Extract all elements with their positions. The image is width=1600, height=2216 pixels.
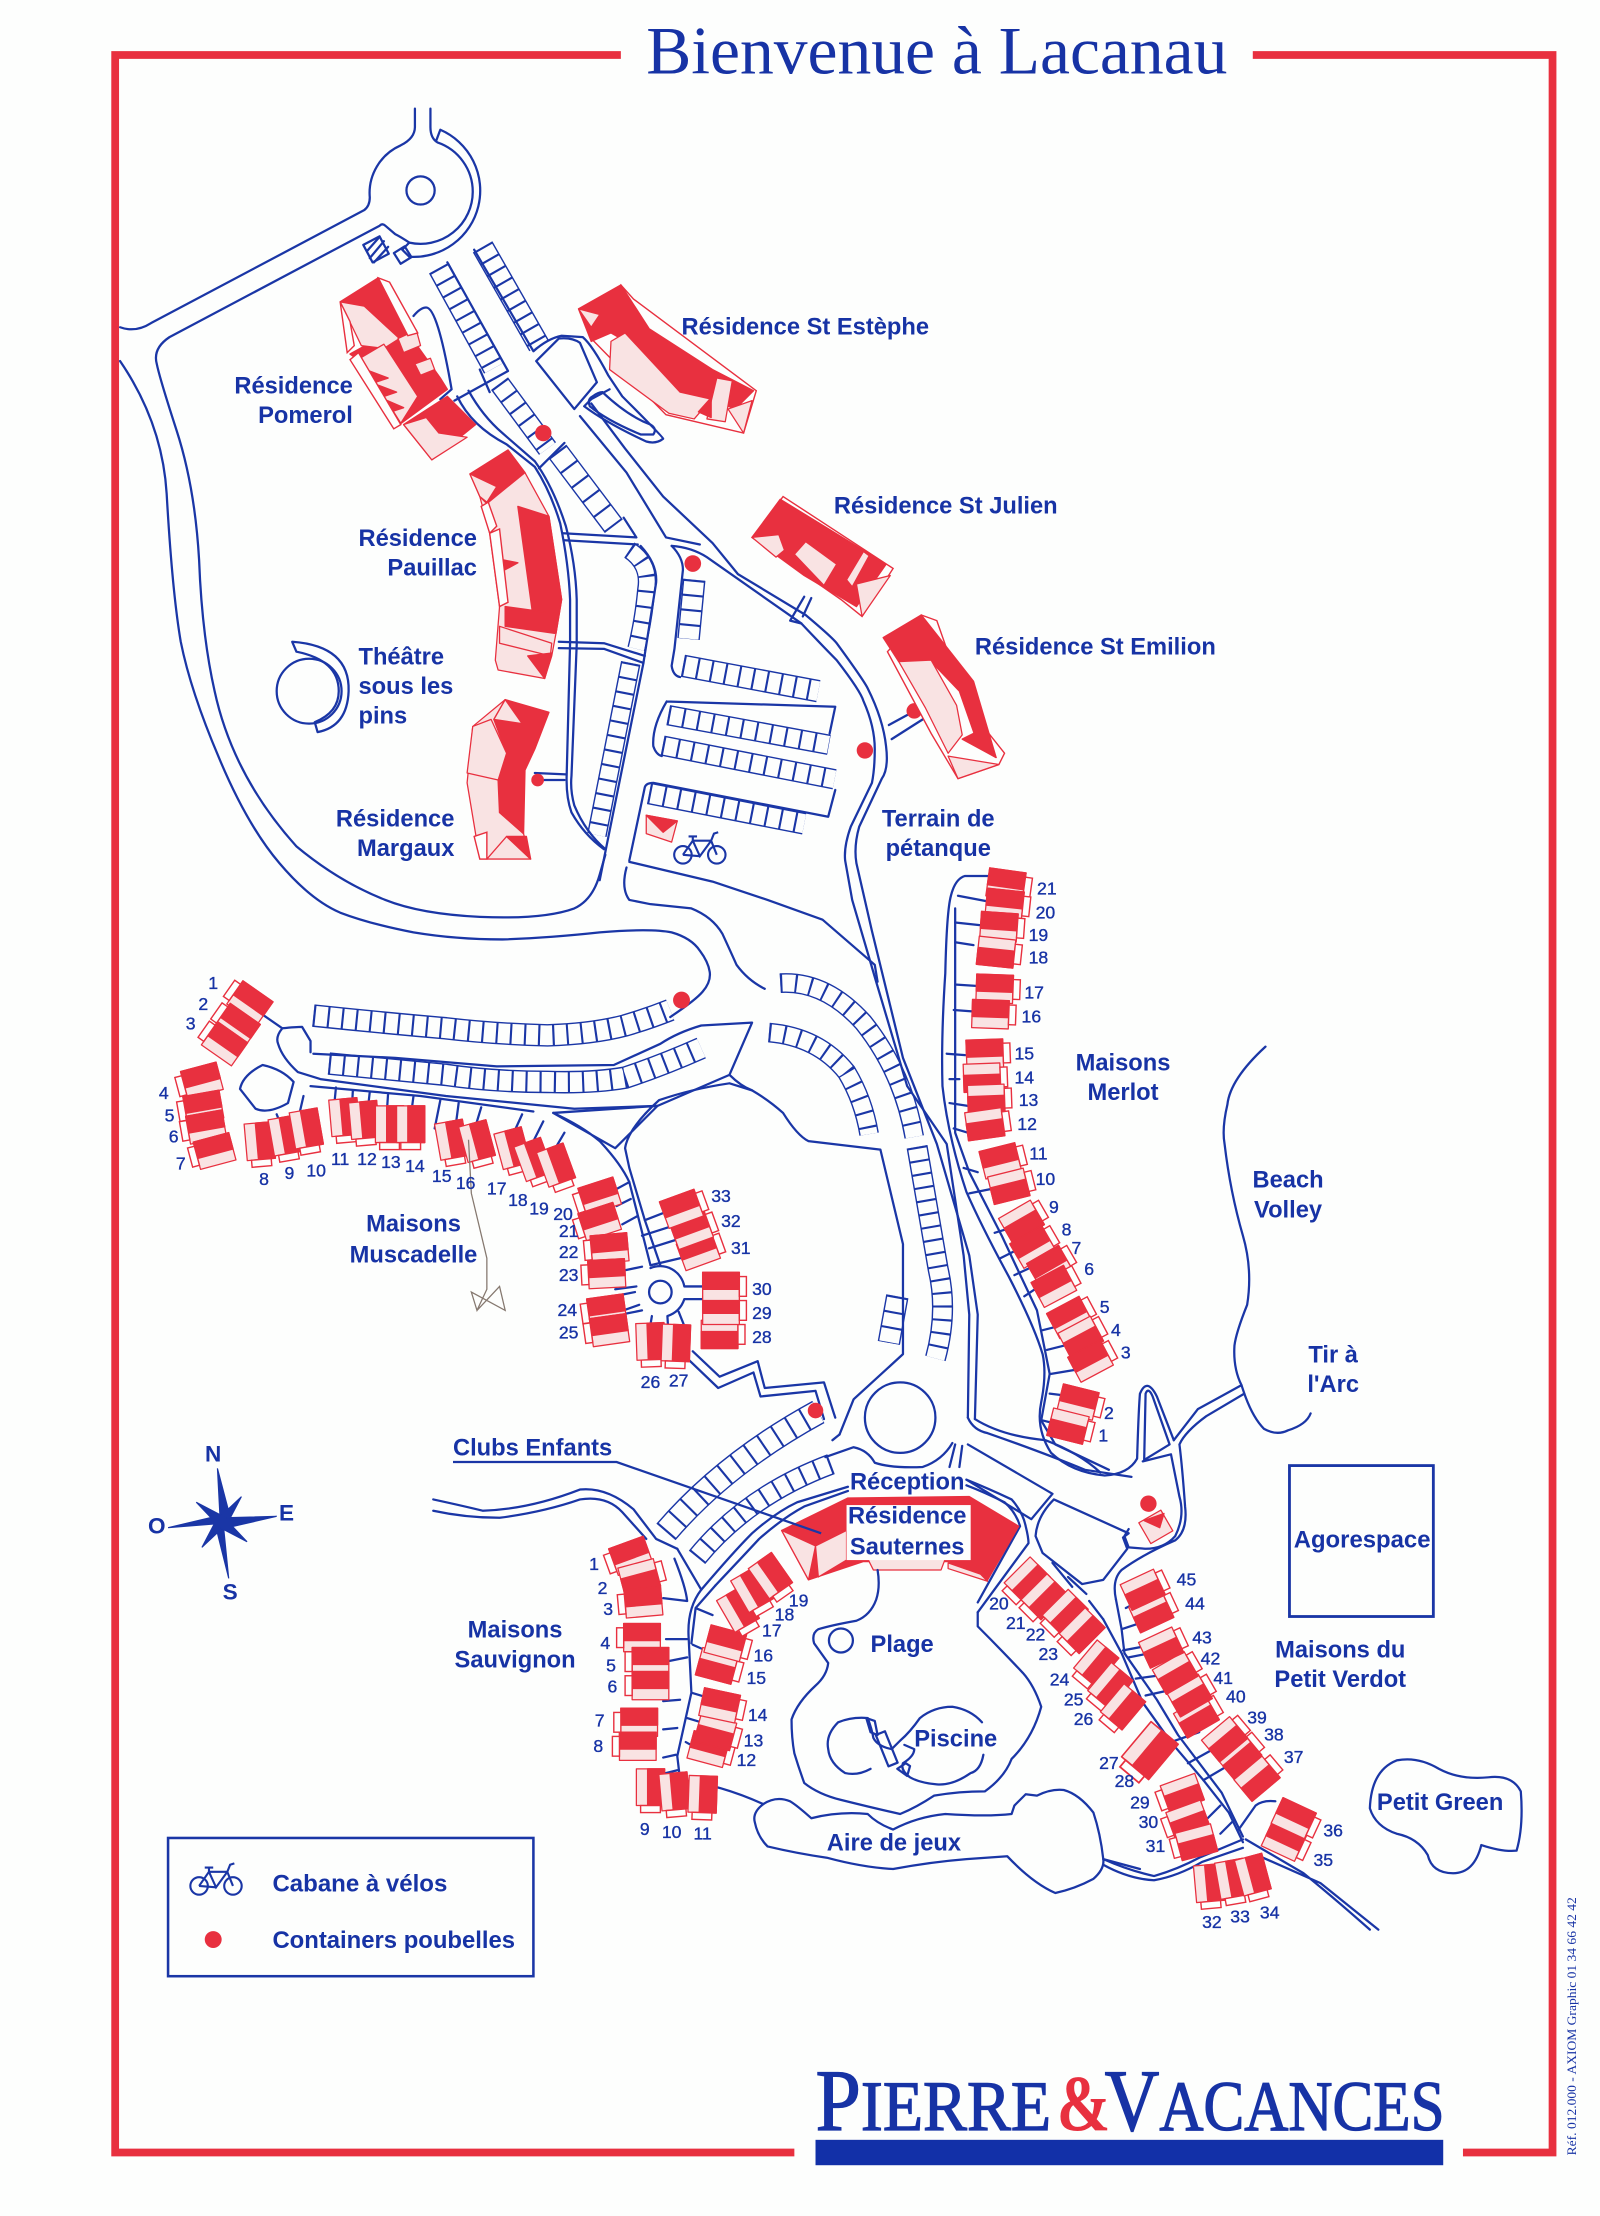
house numbers: 10 xyxy=(662,1822,682,1842)
residence labels: Muscadelle xyxy=(350,1242,477,1268)
house numbers: 4 xyxy=(159,1083,169,1103)
hut and bike xyxy=(646,815,726,864)
house numbers: 12 xyxy=(1017,1114,1037,1134)
house numbers: 8 xyxy=(593,1736,603,1756)
house numbers: 23 xyxy=(1038,1644,1058,1664)
residence labels: Sauvignon xyxy=(455,1647,576,1673)
agorespace box xyxy=(1289,1466,1433,1617)
house numbers: 16 xyxy=(1022,1007,1041,1027)
house numbers: 21 xyxy=(559,1221,578,1241)
house numbers: 22 xyxy=(1026,1624,1045,1644)
Théâtre sous les pins xyxy=(277,642,349,732)
house numbers: 28 xyxy=(1115,1771,1134,1791)
Résidence St Estèphe xyxy=(579,285,756,433)
Maisons Merlot houses xyxy=(963,868,1120,1446)
house numbers: 27 xyxy=(1099,1753,1119,1773)
residence labels: Agorespace xyxy=(1294,1527,1431,1553)
house numbers: 42 xyxy=(1201,1648,1220,1668)
aire de jeux outline xyxy=(754,1790,1140,1893)
house numbers: 16 xyxy=(456,1173,476,1193)
house numbers: 29 xyxy=(752,1303,772,1323)
house numbers: 29 xyxy=(1130,1792,1150,1812)
residence labels: Maisons du xyxy=(1275,1637,1405,1663)
residence labels: Résidence xyxy=(358,526,477,552)
compass rose: N xyxy=(205,1441,221,1466)
house numbers: 1 xyxy=(208,973,218,993)
house numbers: 12 xyxy=(357,1149,377,1169)
petit green outline xyxy=(1370,1759,1522,1873)
residence labels: Plage xyxy=(871,1632,934,1658)
house numbers: 11 xyxy=(1029,1143,1048,1163)
compass rose: O xyxy=(148,1513,166,1538)
Sauvignon drives xyxy=(660,1559,763,1804)
house numbers: 18 xyxy=(508,1190,528,1210)
west loop xyxy=(264,1016,903,1435)
house numbers: 1 xyxy=(589,1554,599,1574)
house numbers: 33 xyxy=(1230,1907,1250,1927)
house numbers: 7 xyxy=(1072,1238,1081,1258)
house numbers: 19 xyxy=(789,1591,808,1611)
residence labels: sous les xyxy=(358,674,453,700)
house numbers: 36 xyxy=(1323,1821,1343,1841)
house numbers: 18 xyxy=(1029,947,1048,967)
house numbers: 13 xyxy=(744,1730,763,1750)
house numbers: 14 xyxy=(405,1156,425,1176)
residence labels: Margaux xyxy=(357,836,454,862)
house numbers: 9 xyxy=(640,1819,650,1839)
residence labels: Pomerol xyxy=(258,403,353,429)
residence labels: Résidence St Estèphe xyxy=(682,314,929,340)
residence labels: Maisons xyxy=(366,1211,461,1237)
house numbers: 24 xyxy=(557,1300,577,1320)
house numbers: 43 xyxy=(1192,1627,1212,1647)
residence labels: Beach xyxy=(1253,1168,1324,1194)
house numbers: 11 xyxy=(331,1149,349,1169)
house numbers: 25 xyxy=(1064,1689,1084,1709)
house numbers: 9 xyxy=(1049,1197,1059,1217)
printer reference: Réf. 012.000 - AXIOM Graphic 01 34 66 42 42 xyxy=(1565,1897,1579,2155)
residence labels: Théâtre xyxy=(358,644,444,670)
house numbers: 45 xyxy=(1177,1569,1196,1589)
residence labels: pins xyxy=(358,704,407,730)
Pierre & Vacances logo: PIERRE xyxy=(816,2052,1051,2149)
house numbers: 18 xyxy=(775,1605,794,1625)
house numbers: 38 xyxy=(1264,1725,1284,1745)
house numbers: 40 xyxy=(1226,1687,1246,1707)
piscine xyxy=(828,1628,983,1785)
house numbers: 14 xyxy=(748,1705,768,1725)
house numbers: 15 xyxy=(432,1166,452,1186)
Résidence Pomerol xyxy=(340,278,476,460)
house numbers: 6 xyxy=(1084,1259,1094,1279)
Merlot road xyxy=(942,876,1174,1475)
north roundabout xyxy=(120,109,710,1017)
house numbers: 5 xyxy=(606,1656,616,1676)
house numbers: 23 xyxy=(559,1265,579,1285)
house numbers: 44 xyxy=(1185,1593,1205,1613)
Résidence Sauternes xyxy=(782,1497,1019,1581)
house numbers: 19 xyxy=(1029,925,1048,945)
Résidence St Emilion xyxy=(883,615,1005,779)
residence labels: Maisons xyxy=(468,1618,562,1644)
legend xyxy=(168,1838,533,1976)
central roads xyxy=(447,262,508,401)
house numbers: 33 xyxy=(711,1186,731,1206)
house numbers: 25 xyxy=(559,1323,579,1343)
house numbers: 6 xyxy=(607,1677,617,1697)
house numbers: 5 xyxy=(1100,1297,1110,1317)
legend: Containers poubelles xyxy=(272,1928,515,1954)
Résidence St Julien xyxy=(752,497,893,616)
house numbers: 26 xyxy=(1074,1709,1094,1729)
house numbers: 15 xyxy=(746,1668,766,1688)
house numbers: 16 xyxy=(754,1646,773,1666)
clubs enfants pointer line xyxy=(453,1462,821,1533)
residence labels: Merlot xyxy=(1087,1080,1159,1106)
house numbers: 24 xyxy=(1050,1670,1070,1690)
house numbers: 32 xyxy=(1202,1912,1222,1932)
house numbers: 31 xyxy=(731,1238,751,1258)
residence labels: Maisons xyxy=(1076,1051,1170,1077)
plage outline xyxy=(792,1570,1041,1814)
house numbers: 13 xyxy=(1019,1090,1039,1110)
house numbers: 3 xyxy=(1121,1342,1131,1362)
beach volley and tir à l'arc boundary xyxy=(1224,1047,1311,1433)
residence labels: Tir à xyxy=(1308,1343,1359,1369)
house numbers: 6 xyxy=(169,1127,179,1147)
residence labels: Résidence xyxy=(336,807,454,833)
compass rose: S xyxy=(223,1580,238,1605)
title: Bienvenue à Lacanau xyxy=(646,13,1227,88)
house numbers: 2 xyxy=(598,1578,607,1598)
residence labels: Aire de jeux xyxy=(827,1831,961,1857)
house numbers: 17 xyxy=(762,1620,782,1640)
house numbers: 13 xyxy=(381,1152,401,1172)
house numbers: 5 xyxy=(165,1105,175,1125)
residence labels: Clubs Enfants xyxy=(453,1436,612,1462)
house numbers: 3 xyxy=(186,1014,196,1034)
house numbers: 21 xyxy=(1006,1613,1026,1633)
house numbers: 35 xyxy=(1314,1850,1333,1870)
house numbers: 7 xyxy=(176,1153,186,1173)
Résidence Margaux xyxy=(467,700,549,859)
house numbers: 9 xyxy=(284,1163,294,1183)
house numbers xyxy=(159,878,1343,1932)
Pierre & Vacances logo: & xyxy=(1057,2061,1110,2148)
residence labels: l'Arc xyxy=(1307,1372,1359,1398)
residence labels: Petit Verdot xyxy=(1274,1667,1406,1693)
house numbers: 41 xyxy=(1213,1668,1233,1688)
house numbers: 11 xyxy=(694,1823,712,1843)
residence labels: Résidence St Julien xyxy=(834,493,1058,519)
house numbers: 28 xyxy=(752,1327,772,1347)
house numbers: 4 xyxy=(1111,1320,1121,1340)
Maisons du Petit Verdot houses xyxy=(999,1510,1323,1910)
Résidence Pauillac xyxy=(470,450,562,678)
house numbers: 20 xyxy=(1036,902,1055,922)
house numbers: 2 xyxy=(198,994,208,1014)
house numbers: 10 xyxy=(1036,1169,1055,1189)
residence labels: Volley xyxy=(1254,1197,1323,1223)
house numbers: 8 xyxy=(259,1169,269,1189)
residence labels: pétanque xyxy=(886,836,991,862)
house numbers: 39 xyxy=(1247,1708,1267,1728)
Pierre & Vacances logo: VACANCES xyxy=(1105,2052,1445,2149)
residence labels: Petit Green xyxy=(1377,1790,1503,1816)
house numbers: 2 xyxy=(1104,1403,1114,1423)
house numbers: 31 xyxy=(1146,1836,1165,1856)
Maisons Sauvignon houses xyxy=(602,1536,796,1820)
house numbers: 8 xyxy=(1062,1220,1072,1240)
house numbers: 3 xyxy=(603,1599,613,1619)
house numbers: 7 xyxy=(595,1711,605,1731)
legend: Cabane à vélos xyxy=(272,1872,447,1898)
hatched utility block xyxy=(363,236,389,262)
residence labels: Résidence St Emilion xyxy=(975,635,1216,661)
residence labels xyxy=(234,314,1503,1857)
house numbers: 32 xyxy=(721,1211,741,1231)
Verdot spine xyxy=(1103,1600,1243,1842)
house numbers: 26 xyxy=(641,1372,660,1392)
house numbers: 22 xyxy=(559,1242,578,1262)
house numbers: 20 xyxy=(553,1204,573,1224)
residence labels: Réception xyxy=(850,1470,964,1496)
house numbers: 15 xyxy=(1014,1043,1034,1063)
house numbers: 14 xyxy=(1014,1067,1034,1087)
containers poubelles dots xyxy=(535,425,1157,1512)
big south roundabout xyxy=(865,1382,935,1453)
road network xyxy=(120,109,1378,1930)
house numbers: 17 xyxy=(487,1179,507,1199)
house numbers: 27 xyxy=(669,1371,688,1391)
house numbers: 10 xyxy=(306,1160,326,1180)
compass rose xyxy=(148,1441,294,1605)
residence labels: Terrain de xyxy=(882,807,995,833)
handwritten scribble xyxy=(469,1140,505,1310)
house numbers: 12 xyxy=(737,1750,756,1770)
house numbers: 30 xyxy=(752,1279,772,1299)
house numbers: 1 xyxy=(1098,1426,1108,1446)
Maisons Muscadelle houses xyxy=(174,977,746,1369)
house numbers: 19 xyxy=(529,1198,549,1218)
compass rose: E xyxy=(279,1501,294,1526)
Pierre & Vacances logo xyxy=(816,2052,1445,2165)
house numbers: 17 xyxy=(1024,983,1044,1003)
parking rows xyxy=(313,247,943,1557)
residence labels: Pauillac xyxy=(387,556,477,582)
house numbers: 21 xyxy=(1037,878,1057,898)
residence labels: Résidence xyxy=(234,374,353,400)
house numbers: 34 xyxy=(1260,1902,1280,1922)
small roundabout xyxy=(649,1281,672,1303)
house numbers: 4 xyxy=(600,1633,610,1653)
house numbers: 37 xyxy=(1284,1747,1304,1767)
house numbers: 30 xyxy=(1139,1812,1158,1832)
residence labels: Résidence xyxy=(848,1503,966,1529)
house numbers: 20 xyxy=(989,1593,1009,1613)
residence labels: Piscine xyxy=(914,1726,997,1752)
residence labels: Sauternes xyxy=(850,1534,964,1560)
